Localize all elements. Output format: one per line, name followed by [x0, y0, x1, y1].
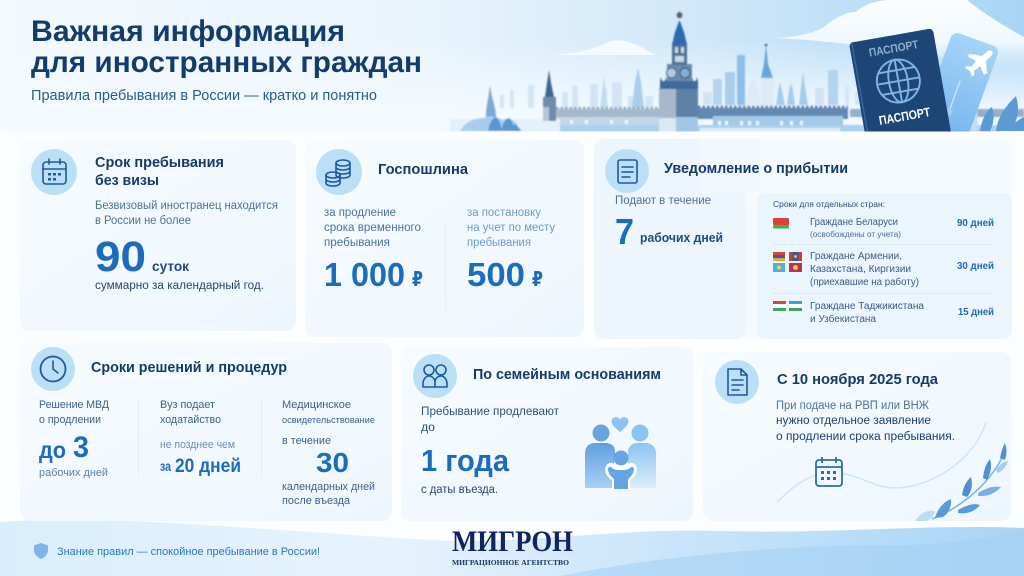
fee: постановка на учет: на учет по месту — [467, 222, 555, 234]
column: решение МВД: о продлении — [39, 414, 101, 426]
note: суммарно за календарный год. — [95, 280, 264, 292]
country table — [757, 193, 1012, 339]
illustration: family — [585, 417, 656, 489]
column: вуз — [160, 399, 241, 477]
icon: document — [715, 360, 759, 404]
row: Таджикистан, Узбекистан — [773, 301, 994, 325]
icon: people — [413, 354, 457, 398]
ticket — [940, 33, 998, 132]
panel: срок пребывания без визы — [20, 140, 296, 331]
right foliage light — [970, 110, 978, 131]
row: Беларусь: Граждане Беларуси — [810, 217, 898, 228]
passport: ПАСПОРТ — [868, 39, 919, 60]
logo: МИГРОН — [452, 525, 573, 558]
deadline: рабочих дней — [640, 230, 723, 245]
fee: продление — [324, 207, 423, 293]
heading: С 10 ноября 2025 года — [777, 372, 939, 388]
column: вуз: не позднее чем — [160, 439, 235, 451]
description: При подаче на РВП или ВНЖ — [776, 400, 929, 412]
icon: document list — [605, 149, 649, 193]
passport: ПАСПОРТ — [878, 105, 932, 128]
text and number: Пребывание продлевают — [421, 404, 559, 418]
description — [776, 400, 955, 443]
deadline: 7 — [615, 211, 634, 252]
left foliage — [460, 116, 522, 131]
lower band — [450, 119, 560, 132]
kremlin wall left — [556, 109, 659, 117]
column: вуз: 20 дней — [175, 456, 241, 477]
kremlin wall right — [698, 108, 848, 119]
text and number: с даты въезда. — [421, 484, 498, 496]
column: решение МВД: рабочих дней — [39, 467, 108, 479]
fee: постановка на учет — [467, 207, 555, 293]
number: 90 суток: суток — [152, 258, 190, 274]
row: Беларусь: 90 дней — [957, 217, 994, 229]
heading — [95, 155, 224, 189]
skyline illustration — [450, 12, 1024, 132]
heading: без визы — [95, 173, 159, 189]
row: Таджикистан, Узбекистан: Граждане Таджикистана — [810, 301, 924, 312]
icon: coins — [316, 149, 362, 195]
column: решение МВД: 3 — [73, 431, 89, 464]
right tower — [761, 76, 774, 107]
row: Таджикистан, Узбекистан: 15 дней — [958, 306, 994, 318]
icon: plane — [965, 50, 993, 77]
fee: постановка на учет: ₽ — [532, 269, 543, 291]
row: Таджикистан, Узбекистан: и Узбекистана — [810, 313, 876, 325]
far buildings — [500, 82, 653, 108]
panel: уведомление о прибытии — [594, 139, 1012, 339]
fee: продление: ₽ — [412, 269, 423, 291]
column: медицинское освидетельствование: освидетельствование — [282, 415, 375, 426]
icon: calendar small — [816, 457, 842, 486]
row: Беларусь: (освобождены от учета) — [810, 229, 901, 239]
table heading: Сроки для отдельных стран: — [773, 199, 885, 209]
icon: clock — [31, 347, 75, 391]
column: вуз: Вуз подает — [160, 399, 215, 411]
deadline — [615, 195, 723, 252]
row: Армения, Казахстан, Киргизия: (приехавшие на работу) — [810, 276, 919, 288]
row: Армения, Казахстан, Киргизия — [773, 251, 994, 288]
column: вуз: ходатайство — [160, 414, 221, 426]
small cloud — [548, 40, 656, 55]
title: для иностранных граждан — [31, 46, 422, 79]
column: медицинское освидетельствование: календарных дней — [282, 481, 375, 493]
icon: calendar — [31, 149, 77, 195]
column: медицинское освидетельствование: 30 — [316, 447, 349, 478]
timeline curve — [777, 422, 986, 502]
description: Безвизовый иностранец находится — [95, 200, 278, 212]
column: медицинское освидетельствование: Медицинское — [282, 399, 351, 411]
logo: МИГРАЦИОННОЕ АГЕНТСТВО — [452, 559, 570, 567]
column: решение МВД: Решение МВД — [39, 399, 110, 411]
spasskaya tower — [675, 88, 699, 118]
panel: с 10 ноября 2025 года — [703, 352, 1011, 521]
text and number: до — [421, 420, 435, 434]
text and number: 1 года — [421, 443, 510, 478]
column: вуз: за — [160, 458, 171, 474]
description — [95, 200, 278, 227]
fee: продление: срока временного — [324, 222, 421, 234]
panel: по семейным основаниям — [401, 347, 693, 521]
column: медицинское освидетельствование: в течение — [282, 435, 331, 447]
fee: продление: 1 000 — [324, 256, 405, 293]
heading: Срок пребывания — [95, 155, 224, 171]
icon: shield — [34, 543, 48, 559]
row: Армения, Казахстан, Киргизия: 30 дней — [957, 260, 994, 272]
footer wave — [0, 520, 1024, 576]
number: 90 суток — [95, 233, 190, 281]
heading: Госпошлина — [378, 162, 469, 178]
windows — [570, 120, 803, 126]
panel: госпошлина — [305, 140, 584, 337]
column: решение МВД — [39, 399, 110, 479]
column: медицинское освидетельствование — [282, 399, 375, 507]
heading: По семейным основаниям — [473, 367, 661, 383]
title: Важная информация — [31, 15, 345, 48]
description: в России не более — [95, 215, 191, 227]
text and number — [421, 404, 559, 496]
slogan — [34, 543, 320, 559]
branch with leaves — [915, 443, 1008, 521]
left tower — [543, 97, 556, 121]
fee: продление: за продление — [324, 207, 396, 219]
column: медицинское освидетельствование: после въезда — [282, 495, 351, 507]
passport — [850, 28, 951, 132]
deadline: Подают в течение — [615, 195, 711, 207]
header banner — [2, 0, 1024, 132]
row: Армения, Казахстан, Киргизия: Граждане Армении, — [810, 251, 902, 262]
slogan: Знание правил — спокойное пребывание в России! — [57, 546, 320, 558]
subtitle: Правила пребывания в России — кратко и понятно — [31, 88, 377, 104]
column: решение МВД: до — [39, 437, 66, 463]
fee: постановка на учет: 500 — [467, 256, 525, 293]
fee: постановка на учет: за постановку — [467, 207, 541, 219]
fee: продление: пребывания — [324, 237, 390, 249]
big cloud — [775, 0, 1024, 70]
heading: Уведомление о прибытии — [664, 161, 848, 177]
fee: постановка на учет: пребывания — [467, 237, 531, 249]
description: о продлении срока пребывания. — [776, 431, 955, 443]
far left spire — [486, 85, 496, 117]
leaves right — [980, 96, 1024, 131]
number: 90 суток: 90 — [95, 233, 146, 281]
title — [31, 15, 422, 79]
row: Беларусь — [773, 217, 994, 239]
panel: сроки решений и процедур — [20, 343, 392, 521]
heading: Сроки решений и процедур — [91, 360, 287, 376]
description: нужно отдельное заявление — [776, 415, 931, 427]
row: Армения, Казахстан, Киргизия: Казахстана, Киргизии — [810, 264, 911, 275]
